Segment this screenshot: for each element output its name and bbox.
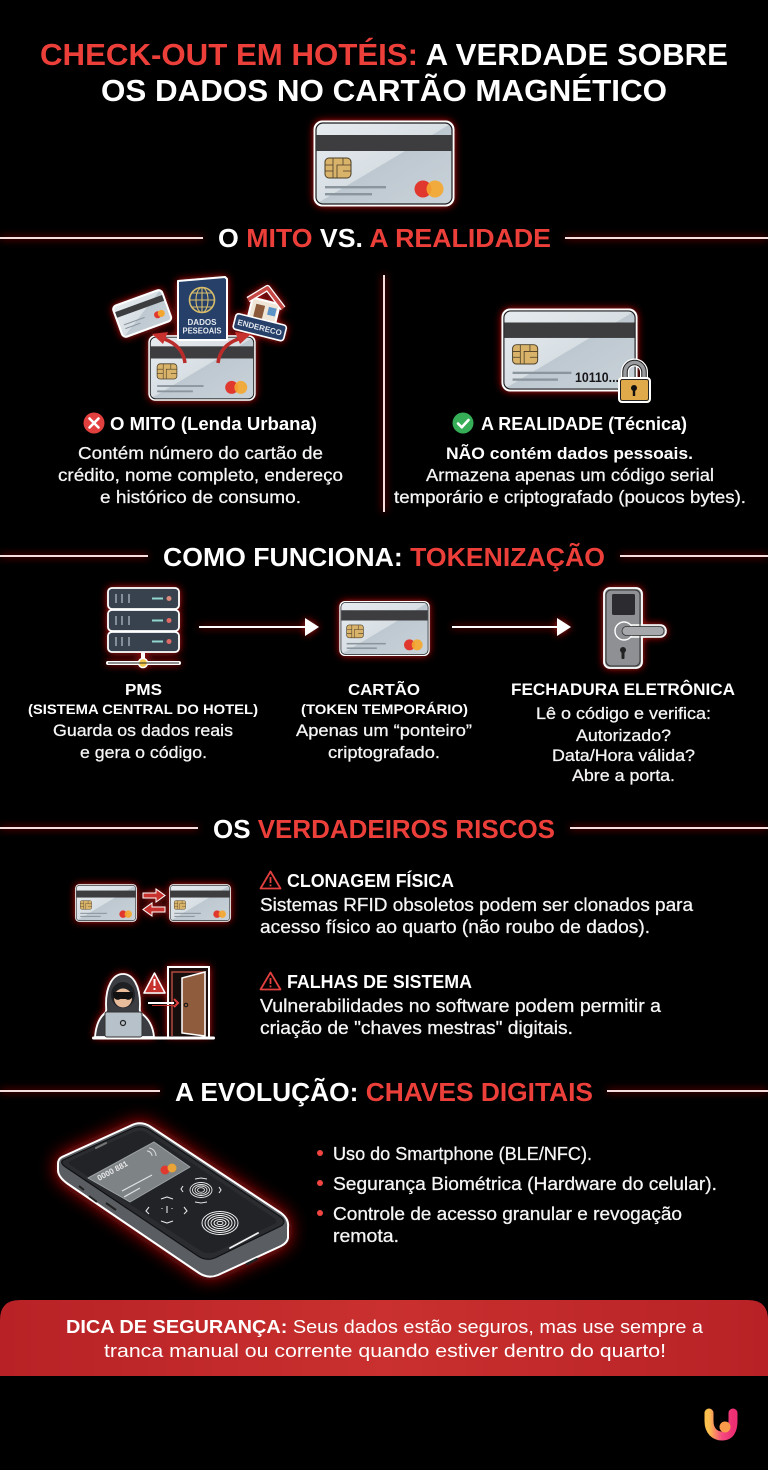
step: pms text: (SISTEMA CENTRAL DO HOTEL) — [28, 701, 258, 717]
icon: token card — [339, 601, 430, 656]
fingerprint large — [202, 1212, 238, 1234]
arrow: server to card — [199, 618, 319, 636]
small card — [112, 289, 172, 338]
banner: dica de seguranca: tranca manual ou corrente quando estiver dentro do quarto! — [104, 1340, 666, 1361]
risk: falhas — [260, 972, 662, 1038]
icon: myth card with personal data: PESEOAIS — [182, 326, 222, 336]
icon: hacker and door — [92, 967, 215, 1040]
icon: card with lock — [501, 309, 650, 402]
risk: clonagem: Sistemas RFID obsoletos podem ser clonados para — [260, 895, 694, 915]
icon: red x — [84, 412, 104, 434]
myth text — [58, 443, 343, 507]
icon: card with lock: 10110... — [575, 370, 619, 385]
reality text: temporário e criptografado (poucos bytes). — [394, 487, 746, 507]
banner: dica de seguranca: DICA DE SEGURANÇA: Seus dados estão seguros, mas use sempre a — [66, 1316, 704, 1337]
icon: electronic lock — [604, 588, 666, 668]
icon: green check — [452, 412, 474, 434]
risk: clonagem — [260, 870, 694, 937]
reality heading: A REALIDADE (Técnica) — [481, 413, 687, 434]
step: fechadura text: FECHADURA ELETRÔNICA — [511, 680, 735, 699]
icon: server — [108, 588, 179, 668]
step: cartao text: (TOKEN TEMPORÁRIO) — [301, 701, 468, 717]
risk: falhas: Vulnerabilidades no software podem permitir a — [260, 996, 662, 1016]
title — [40, 37, 728, 108]
icon: smartphone: 0000 881 — [96, 1159, 130, 1183]
step: cartao text: CARTÃO — [348, 679, 420, 699]
icon: smartphone — [58, 1123, 288, 1277]
step: fechadura text: Data/Hora válida? — [552, 746, 695, 765]
risk: clonagem: CLONAGEM FÍSICA — [287, 870, 454, 891]
list: digital keys: Segurança Biométrica (Hardware do celular). — [333, 1174, 717, 1194]
icon: myth card with personal data — [112, 277, 295, 401]
title: CHECK-OUT EM HOTÉIS: A VERDADE SOBRE — [40, 37, 728, 72]
step: pms text — [28, 682, 258, 762]
banner: dica de seguranca — [0, 1300, 768, 1376]
icon: cloned cards — [75, 884, 231, 922]
title: OS DADOS NO CARTÃO MAGNÉTICO — [101, 73, 667, 108]
step: cartao text — [296, 679, 472, 762]
step: cartao text: criptografado. — [328, 743, 440, 762]
icon: myth card with personal data: DADOS — [188, 318, 217, 327]
list: digital keys: Uso do Smartphone (BLE/NFC). — [333, 1144, 592, 1164]
step: cartao text: Apenas um “ponteiro” — [296, 721, 472, 740]
step: fechadura text: Abre a porta. — [572, 766, 675, 785]
risk: falhas: criação de "chaves mestras" digitais. — [260, 1018, 573, 1038]
reality text — [394, 443, 746, 507]
heading: evolucao: A EVOLUÇÃO: CHAVES DIGITAIS — [175, 1077, 593, 1107]
risk: falhas: FALHAS DE SISTEMA — [287, 972, 472, 992]
heading: como funciona: COMO FUNCIONA: TOKENIZAÇÃO — [163, 542, 605, 572]
icon: myth card with personal data: ENDERECO — [237, 318, 283, 338]
heading: o mito vs a realidade: O MITO VS. A REALIDADE — [218, 223, 551, 253]
list: digital keys — [317, 1144, 717, 1246]
icon: warning — [260, 972, 280, 990]
myth text: e histórico de consumo. — [100, 487, 301, 507]
step: fechadura text: Lê o código e verifica: — [536, 704, 711, 723]
panel: realidade — [394, 309, 746, 507]
icon: hero card — [314, 120, 454, 206]
heading: riscos: OS VERDADEIROS RISCOS — [213, 814, 555, 844]
face id — [146, 1197, 187, 1223]
step: pms text: PMS — [125, 682, 162, 699]
risk: clonagem: acesso físico ao quarto (não roubo de dados). — [260, 917, 650, 937]
list: digital keys: remota. — [333, 1226, 399, 1246]
list: digital keys: Controle de acesso granular e revogação — [333, 1204, 682, 1224]
myth text: Contém número do cartão de — [78, 443, 323, 463]
step: fechadura text: Autorizado? — [576, 726, 671, 745]
step: fechadura text — [511, 680, 735, 785]
fingerprint small — [181, 1178, 221, 1203]
myth heading: O MITO (Lenda Urbana) — [110, 413, 317, 434]
reality text: Armazena apenas um código serial — [426, 465, 714, 485]
reality text: NÃO contém dados pessoais. — [446, 443, 693, 463]
arrow: card to lock — [452, 618, 571, 636]
icon: warning — [260, 872, 280, 888]
icon: logo — [709, 1413, 733, 1436]
myth text: crédito, nome completo, endereço — [58, 465, 343, 485]
step: pms text: Guarda os dados reais — [53, 721, 233, 740]
step: pms text: e gera o código. — [80, 743, 207, 762]
panel: mito — [58, 277, 343, 507]
